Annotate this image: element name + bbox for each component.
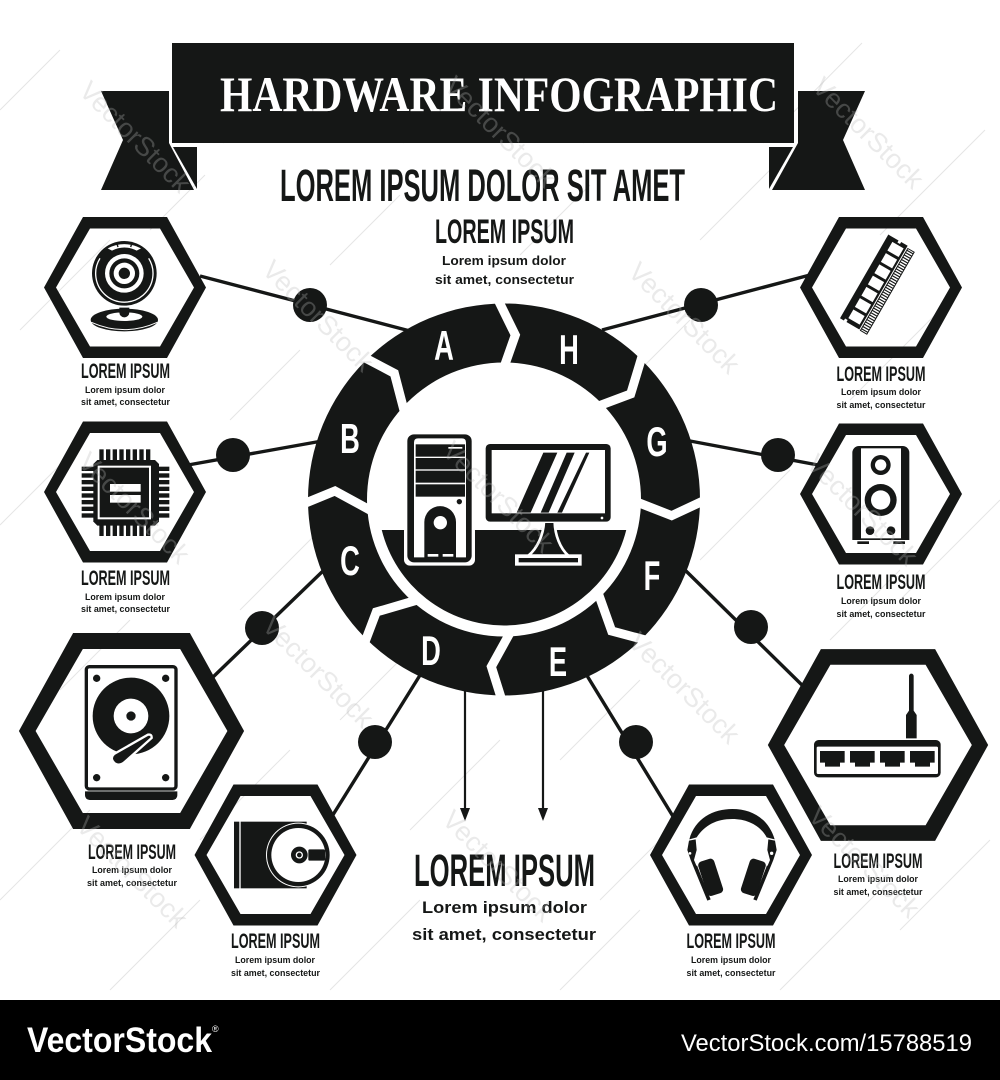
watermarks: VectorStock — [436, 804, 560, 928]
panel: headphones — [650, 784, 812, 979]
icon: webcam — [91, 241, 158, 331]
bottom center text block: Lorem ipsum dolor — [422, 899, 588, 917]
watermarks: VectorStock — [73, 75, 197, 199]
ribbon right fold — [769, 147, 793, 189]
ring letters: D — [421, 627, 441, 674]
ring letters: E — [549, 638, 567, 685]
panel: processor chip — [44, 422, 206, 615]
label: Lorem ipsum dolor — [841, 596, 921, 607]
panel: router — [768, 649, 988, 898]
footer url: VectorStock.com/15788519 — [681, 1030, 972, 1057]
icon: hard drive — [85, 667, 177, 800]
label: sit amet, consectetur — [81, 397, 170, 408]
watermarks: VectorStock — [806, 71, 930, 195]
label: Lorem ipsum dolor — [691, 955, 771, 966]
label: Lorem ipsum dolor — [841, 387, 921, 398]
icon: router — [814, 674, 941, 777]
footer bar — [0, 1000, 1000, 1080]
watermarks: VectorStock — [802, 800, 926, 924]
watermarks: VectorStock — [622, 626, 746, 750]
ring letters: F — [644, 552, 660, 599]
center desk area — [382, 530, 626, 625]
label: LOREM IPSUM — [88, 840, 176, 864]
ring letters: H — [559, 326, 579, 373]
label: LOREM IPSUM — [231, 929, 320, 953]
ribbon main band — [172, 43, 794, 143]
panel: speaker — [800, 424, 962, 620]
connector lines with nodes — [188, 275, 818, 818]
icon: optical drive — [234, 822, 331, 888]
ring letters — [340, 322, 668, 685]
label — [231, 929, 320, 979]
watermarks: VectorStock — [72, 446, 196, 570]
top center text block — [435, 213, 574, 287]
panel: hard drive — [19, 633, 244, 889]
label: LOREM IPSUM — [834, 849, 922, 873]
icon: RAM — [840, 234, 916, 334]
label: Lorem ipsum dolor — [85, 592, 165, 603]
label — [81, 359, 170, 408]
label: sit amet, consectetur — [834, 887, 923, 898]
label — [836, 570, 926, 620]
watermarks: VectorStock — [256, 254, 380, 378]
subtitle: LOREM IPSUM DOLOR SIT AMET — [280, 160, 685, 211]
label: LOREM IPSUM — [836, 570, 926, 594]
label: Lorem ipsum dolor — [85, 385, 165, 396]
banner ribbon — [101, 43, 865, 190]
label: Lorem ipsum dolor — [235, 955, 315, 966]
panel: optical drive — [194, 784, 356, 979]
label: sit amet, consectetur — [231, 968, 320, 979]
label: Lorem ipsum dolor — [838, 874, 918, 885]
watermarks: VectorStock — [438, 70, 562, 194]
panel: webcam — [44, 217, 206, 408]
label — [81, 566, 170, 615]
panel: memory module — [800, 217, 962, 411]
label — [834, 849, 923, 898]
icon: chip — [82, 449, 169, 536]
label: Lorem ipsum dolor — [92, 865, 172, 876]
label: sit amet, consectetur — [686, 968, 776, 979]
ring letters: C — [340, 537, 360, 584]
ribbon left tail — [101, 91, 194, 190]
label: LOREM IPSUM — [836, 362, 926, 386]
label — [836, 362, 926, 411]
watermarks — [70, 70, 930, 934]
watermarks: VectorStock — [622, 256, 746, 380]
ribbon right tail — [772, 91, 865, 190]
icon: speaker — [852, 446, 909, 544]
icon: monitor — [486, 444, 611, 566]
label: LOREM IPSUM — [81, 566, 170, 590]
segmented ring — [300, 298, 707, 702]
label: sit amet, consectetur — [836, 400, 926, 411]
watermarks: VectorStock — [800, 448, 924, 572]
label: LOREM IPSUM — [81, 359, 170, 383]
ring letters: A — [434, 322, 454, 369]
bottom center text block: sit amet, consectetur — [412, 926, 597, 944]
top center text block: Lorem ipsum dolor — [442, 253, 566, 268]
label: sit amet, consectetur — [87, 878, 177, 889]
arrows down — [460, 690, 548, 821]
footer logo: VectorStock — [27, 1021, 212, 1060]
label — [686, 929, 776, 979]
watermarks: VectorStock — [70, 810, 194, 934]
ring letters: G — [646, 418, 668, 465]
title: HARDWARE INFOGRAPHIC — [220, 66, 778, 122]
top center text block: sit amet, consectetur — [435, 272, 574, 287]
footer registered mark: ® — [212, 1024, 219, 1034]
label: LOREM IPSUM — [686, 929, 776, 953]
ribbon left fold — [173, 147, 197, 189]
watermarks: VectorStock — [256, 610, 380, 734]
ring letters: B — [340, 415, 360, 462]
icon: headphones — [687, 809, 777, 901]
label: sit amet, consectetur — [836, 609, 926, 620]
bottom center text block — [412, 845, 597, 944]
label — [87, 840, 177, 889]
watermarks: VectorStock — [436, 435, 560, 559]
bottom center text block: LOREM IPSUM — [414, 845, 595, 896]
label: sit amet, consectetur — [81, 604, 170, 615]
icon: computer tower — [404, 434, 475, 566]
top center text block: LOREM IPSUM — [435, 213, 574, 251]
